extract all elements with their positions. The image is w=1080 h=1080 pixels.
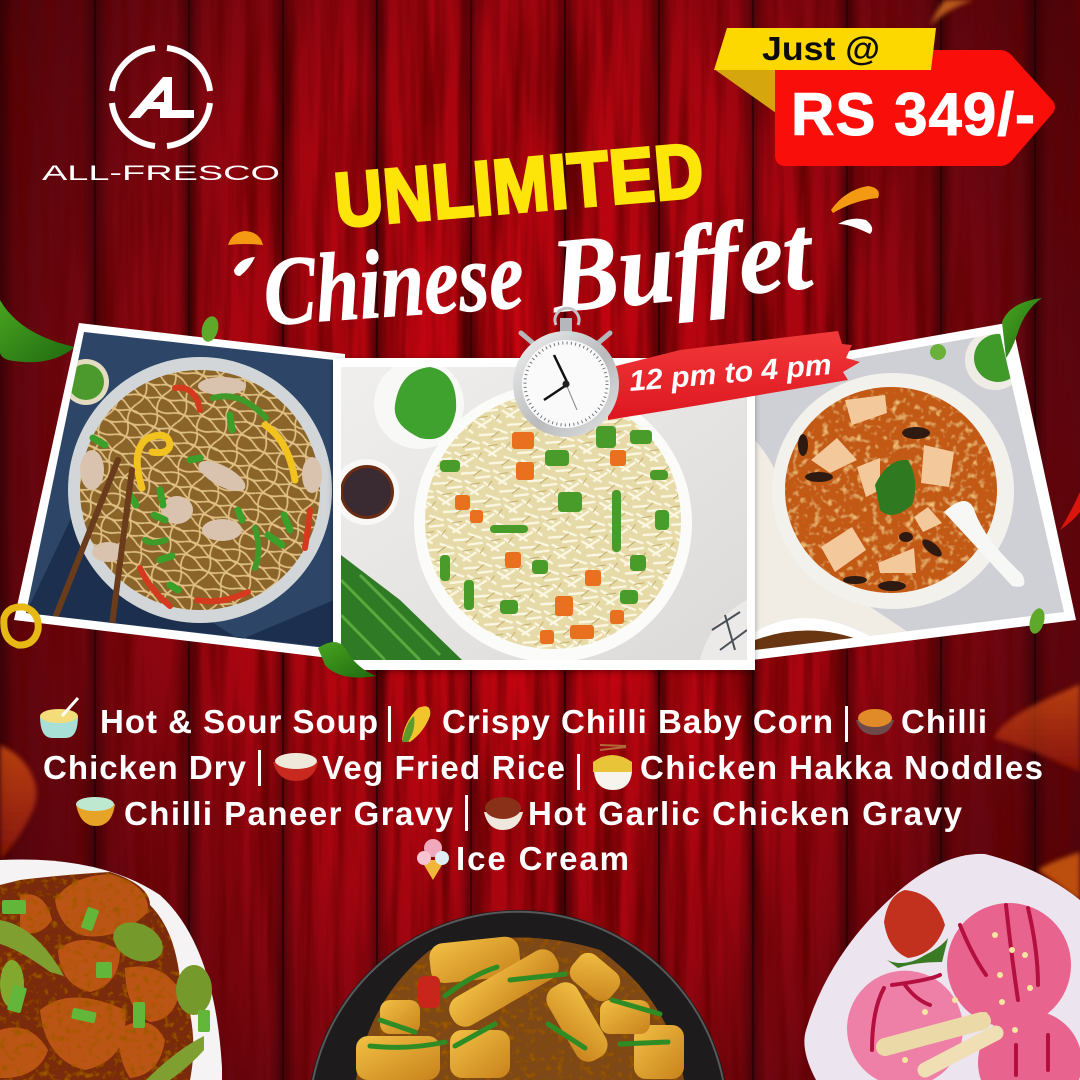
tofu xyxy=(811,395,954,573)
title: Chinese Buffet xyxy=(228,186,879,347)
line 1 xyxy=(100,703,987,742)
line 2: Chicken Hakka Noddles xyxy=(640,749,1043,786)
icon: rice bowl xyxy=(273,753,318,781)
chili: right edge xyxy=(1060,492,1080,530)
icon: chilli chicken bowl xyxy=(856,709,894,735)
icon: chicken gravy bowl xyxy=(484,797,523,830)
leaf: right small xyxy=(1027,607,1047,635)
line 1: Hot & Sour Soup xyxy=(100,703,378,740)
noodle plate xyxy=(68,357,332,623)
icon: corn xyxy=(402,706,430,742)
icon: noodle bowl xyxy=(593,745,632,790)
line 2: Chicken Dry xyxy=(43,749,247,786)
peppers xyxy=(0,915,212,1080)
time ribbon: 12 pm to 4 pm xyxy=(628,349,833,398)
scallion garnish xyxy=(875,460,915,515)
word: Buffet: Buffet xyxy=(545,193,819,335)
word: Chinese: Chinese xyxy=(260,221,527,347)
leaf: left top xyxy=(0,300,75,362)
soup bowl xyxy=(772,373,1014,609)
pepper ring: left xyxy=(4,607,38,645)
corner green bowl xyxy=(965,333,1012,390)
line 3 xyxy=(124,795,963,832)
chicken chunks xyxy=(0,874,180,1078)
strawberry xyxy=(884,890,945,958)
icon: ice cream xyxy=(417,839,449,880)
garnish on table xyxy=(930,344,946,360)
spoon xyxy=(944,501,1024,587)
green chilli bowl xyxy=(374,359,464,449)
wafer rolls xyxy=(885,1021,982,1047)
leaf: small top xyxy=(199,314,221,344)
photo: noodles xyxy=(0,320,345,660)
fold xyxy=(714,69,776,113)
sprinkles xyxy=(902,932,1033,1063)
dish: wok with baby corn xyxy=(311,910,725,1080)
leaf: right top xyxy=(1002,298,1042,358)
line 4: Ice Cream xyxy=(456,840,629,877)
greens and chilli xyxy=(370,967,668,1048)
dish: chilli chicken xyxy=(0,859,222,1080)
baby corn pieces xyxy=(356,935,684,1080)
photo: hot and sour soup xyxy=(750,322,1076,660)
chicken pieces xyxy=(80,377,322,562)
mushrooms xyxy=(798,427,944,591)
clock hands xyxy=(544,355,577,410)
chopsticks xyxy=(55,460,132,625)
checked cloth xyxy=(700,600,747,660)
price badge xyxy=(714,28,1055,166)
soy sauce bowl xyxy=(341,459,399,525)
scoops xyxy=(947,903,1071,1027)
splash accents xyxy=(228,231,263,245)
cloth xyxy=(755,440,906,636)
line 2: Veg Fried Rice xyxy=(322,749,565,786)
red price tag xyxy=(775,50,1055,166)
line 3: Hot Garlic Chicken Gravy xyxy=(528,795,963,832)
line 3: Chilli Paneer Gravy xyxy=(124,795,454,832)
clock ticks xyxy=(525,343,607,425)
logo monogram xyxy=(128,77,194,118)
dish: ice cream xyxy=(804,854,1080,1080)
logo wordmark: ALL-FRESCO xyxy=(42,162,280,185)
noodle vegetables xyxy=(93,388,310,606)
title: Unlimited: UNLIMITED xyxy=(331,128,706,244)
icon: paneer bowl xyxy=(76,797,115,826)
leaf: bottom center xyxy=(318,642,376,678)
menu text xyxy=(43,703,1043,877)
rice vegetables xyxy=(440,426,669,644)
syrup streaks xyxy=(872,905,1048,1075)
just at: Just @ xyxy=(762,30,880,67)
yellow ribbon xyxy=(714,28,936,70)
icon: soup bowl xyxy=(40,698,78,738)
price: RS 349/- xyxy=(791,81,1035,148)
stopwatch xyxy=(513,308,619,437)
line 2 xyxy=(43,749,1043,790)
time ribbon xyxy=(608,331,860,420)
clock face xyxy=(522,340,610,428)
spring onions xyxy=(341,555,462,660)
scallions xyxy=(2,900,210,1032)
logo ring xyxy=(112,48,210,146)
line 1: Chilli xyxy=(901,703,987,740)
line 1: Crispy Chilli Baby Corn xyxy=(442,703,833,740)
photo: fried rice xyxy=(333,358,755,670)
small bowl xyxy=(755,618,869,640)
logo: All-Fresco xyxy=(42,48,280,185)
rice plate xyxy=(414,384,692,662)
side bowl greens xyxy=(70,359,109,405)
